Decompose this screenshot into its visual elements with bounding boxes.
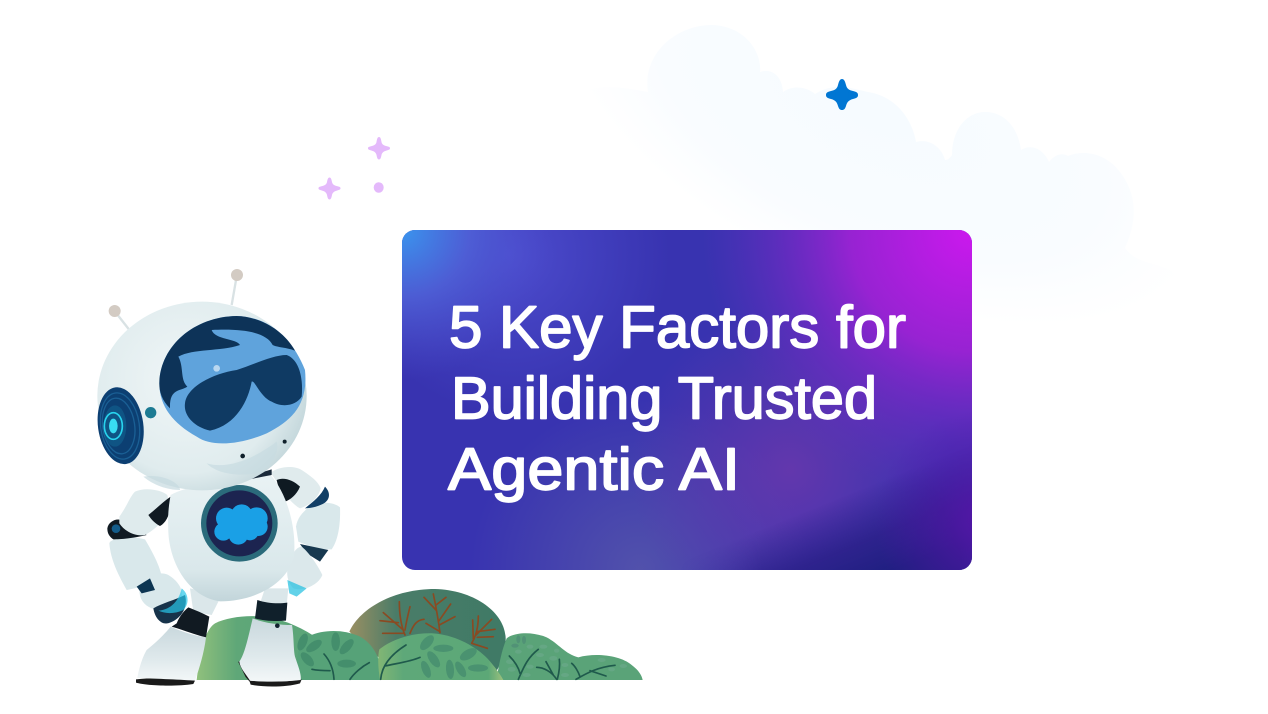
robot ear speaker [93,384,148,467]
panel: gradient title card [402,230,972,570]
title: 5 Key Factors for [449,294,906,360]
star: pink sparkle top [368,137,390,160]
background cloud [575,25,1212,350]
illustration: bushes [197,589,643,680]
robot right boot [239,618,302,687]
bush: back left [197,616,330,680]
star: blue sparkle [826,79,858,110]
robot legs [172,588,288,637]
title: Agentic AI [448,436,740,502]
robot antennas [109,269,243,335]
bush: middle center [378,633,503,680]
title: Building Trusted [451,364,877,432]
bush: right low [497,633,643,680]
bush: dark with brown branches [349,589,506,673]
robot head [93,302,307,490]
infographic scene [97,79,972,686]
robot torso [168,475,294,601]
title [448,294,906,502]
star: pink sparkle left [318,178,340,200]
robot right arm [271,467,340,597]
robot left arm [107,489,188,623]
robot left boot [136,627,206,686]
dot: pink [374,182,384,193]
illustration: robot [93,269,340,687]
icon: chest cloud logo [214,504,268,545]
bush: middle left [295,631,383,680]
robot visor [159,316,305,443]
chest emblem [201,485,278,562]
